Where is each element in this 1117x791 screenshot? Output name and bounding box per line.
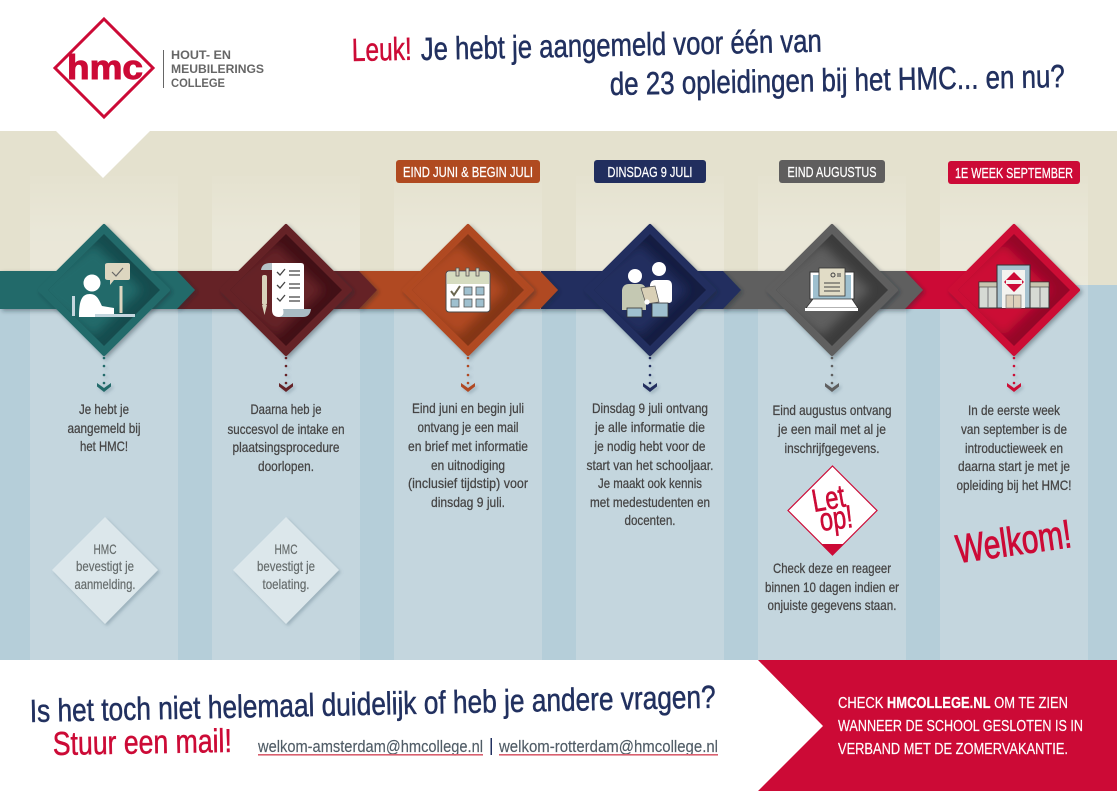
text: het HMC! [80, 438, 128, 454]
footer red arrow panel: CHECK HMCOLLEGE.NL OM TE ZIEN [838, 695, 1068, 712]
date label: EIND AUGUSTUS [788, 164, 876, 181]
text: dinsdag 9 juli. [431, 494, 505, 510]
callout: HMC bevestigt je toelating: toelating. [262, 576, 310, 592]
callout: HMC bevestigt je aanmelding: aanmelding. [74, 576, 136, 592]
dotted arrow [461, 357, 475, 392]
text: en brief met informatie [408, 438, 528, 454]
headline: Je hebt je aangemeld voor één van [420, 23, 822, 67]
background: beige and blue bands with column stripes [0, 131, 1117, 660]
footer question: Is het toch niet helemaal duidelijk of heb je andere vragen? [29, 679, 716, 729]
icon: grey diamond with laptop [762, 226, 896, 354]
text: met medestudenten en [590, 494, 710, 510]
step 5: eind augustus [762, 160, 899, 613]
welkom lettering: Welkom! [953, 512, 1074, 572]
text: en uitnodiging [431, 457, 505, 473]
text: onjuiste gegevens staan. [768, 597, 896, 613]
logo: HMC Hout- en Meubilerings College: HOUT- EN [171, 48, 231, 62]
text: Daarna heb je [250, 401, 322, 417]
text: Dinsdag 9 juli ontvang [592, 400, 708, 416]
dotted arrow [1007, 357, 1021, 392]
step 2: intake [216, 226, 350, 624]
logo: HMC Hout- en Meubilerings College [55, 19, 264, 117]
date label [396, 160, 540, 183]
step 6: eerste week september [944, 161, 1080, 572]
icon: teal diamond with person at computer [34, 226, 168, 354]
footer email addresses [257, 737, 718, 756]
text [408, 400, 528, 510]
text: daarna start je met je [958, 458, 1070, 474]
date label: EIND JUNI & BEGIN JULI [403, 164, 533, 181]
text: start van het schooljaar. [586, 457, 714, 473]
text: docenten. [624, 512, 676, 528]
text: doorlopen. [258, 458, 314, 474]
logo: HMC Hout- en Meubilerings College: MEUBILERINGS [171, 62, 264, 76]
step 1: aangemeld [34, 226, 168, 624]
text: Eind juni en begin juli [412, 400, 524, 416]
text [228, 401, 344, 474]
date label [948, 161, 1080, 184]
text: aangemeld bij [68, 420, 140, 436]
dotted arrow [279, 357, 293, 392]
text: inschrijfgegevens. [784, 440, 880, 456]
date label [594, 160, 706, 183]
date label: DINSDAG 9 JULI [608, 164, 692, 181]
text: Je hebt je [79, 401, 129, 417]
callout: HMC bevestigt je toelating: HMC [274, 541, 298, 557]
timeline arrow band [0, 271, 1020, 309]
callout: HMC bevestigt je aanmelding [52, 517, 158, 624]
step 4: dinsdag 9 juli [580, 160, 714, 528]
text: Eind augustus ontvang [772, 402, 892, 418]
callout: HMC bevestigt je toelating: bevestigt je [257, 558, 315, 574]
text: Je maakt ook kennis [598, 475, 702, 491]
footer email addresses: welkom-rotterdam@hmcollege.nl [498, 737, 718, 756]
icon: navy diamond with two people [580, 226, 714, 354]
icon: orange diamond with calendar [398, 226, 532, 354]
callout: let op diamond: op! [817, 498, 855, 538]
text: ontvang je een mail [418, 419, 518, 435]
text [772, 402, 892, 456]
text [68, 401, 140, 454]
text: succesvol de intake en [228, 421, 344, 437]
callout: HMC bevestigt je aanmelding: HMC [94, 541, 116, 557]
step 3: eind juni [396, 160, 540, 510]
footer question: Stuur een mail! [52, 722, 232, 762]
text: In de eerste week [968, 402, 1061, 418]
text: binnen 10 dagen indien er [765, 579, 899, 595]
logo: HMC Hout- en Meubilerings College: hmc [67, 49, 143, 87]
callout: HMC bevestigt je toelating [233, 517, 339, 624]
headline [351, 23, 1065, 102]
logo: HMC Hout- en Meubilerings College: COLLEGE [171, 76, 225, 90]
text: introductieweek en [965, 440, 1063, 456]
icon: red diamond with school building [944, 226, 1078, 354]
dotted arrow [825, 357, 839, 392]
date label [779, 160, 885, 183]
white pointer triangle under the logo [56, 131, 150, 178]
icon: maroon diamond with checklist scroll [216, 226, 350, 354]
callout: let op diamond: Let [809, 478, 848, 519]
headline: Leuk! [351, 31, 412, 68]
date label: 1E WEEK SEPTEMBER [955, 165, 1073, 182]
text: plaatsingsprocedure [232, 439, 340, 455]
text: je nodig hebt voor de [594, 438, 706, 454]
callout: HMC bevestigt je aanmelding: bevestigt je [76, 558, 134, 574]
text [765, 560, 899, 613]
text: je een mail met al je [777, 421, 886, 437]
text [586, 400, 714, 528]
footer question [29, 679, 716, 762]
text: (inclusief tijdstip) voor [408, 475, 528, 491]
dotted arrow [643, 357, 657, 392]
footer red arrow panel [758, 660, 1117, 791]
footer red arrow panel: VERBAND MET DE ZOMERVAKANTIE. [838, 741, 1068, 758]
text: Check deze en reageer [773, 560, 891, 576]
text [956, 402, 1072, 493]
dotted arrow [97, 357, 111, 392]
text: van september is de [961, 421, 1067, 437]
callout: let op diamond [788, 466, 877, 555]
text: opleiding bij het HMC! [956, 477, 1072, 493]
footer email addresses: welkom-amsterdam@hmcollege.nl [257, 737, 483, 756]
text: je alle informatie die [594, 419, 705, 435]
